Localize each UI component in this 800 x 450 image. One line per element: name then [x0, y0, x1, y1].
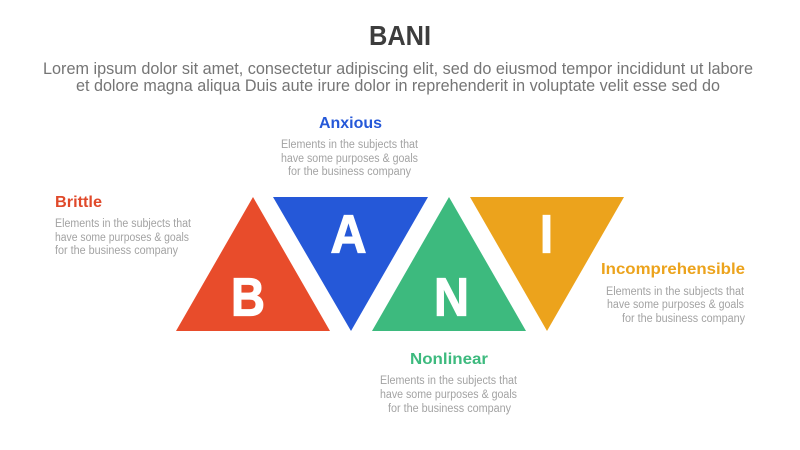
label: Incomprehensible: have some purposes & goals: [607, 299, 744, 311]
label: Anxious: [281, 115, 419, 178]
intro text: Lorem ipsum dolor sit amet, consectetur adipiscing elit, sed do eiusmod tempor incididunt ut labore: [43, 60, 753, 78]
label: Brittle: [55, 194, 192, 257]
label: Nonlinear: for the business company: [388, 403, 511, 415]
intro text: [43, 60, 753, 95]
triangle diagram: [176, 197, 624, 331]
label: Incomprehensible: [601, 261, 745, 325]
label: Brittle: Elements in the subjects that: [55, 218, 192, 230]
label: Nonlinear: have some purposes & goals: [380, 389, 517, 401]
triangle I: orange: [470, 197, 624, 331]
label: Anxious: have some purposes & goals: [281, 153, 418, 165]
label: Nonlinear: Nonlinear: [410, 351, 488, 368]
label: Incomprehensible: for the business company: [622, 313, 745, 325]
label: Brittle: for the business company: [55, 245, 178, 257]
triangle N: green: [372, 197, 526, 331]
label: Anxious: Elements in the subjects that: [281, 139, 419, 151]
label: Anxious: for the business company: [288, 166, 411, 178]
label: Nonlinear: [380, 351, 518, 415]
intro text: et dolore magna aliqua Duis aute irure dolor in reprehenderit in voluptate velit esse sed do: [76, 77, 720, 95]
triangle B: red: B: [231, 268, 265, 328]
triangle A: blue: [273, 197, 428, 331]
label: Incomprehensible: Incomprehensible: [601, 261, 745, 278]
triangle A: blue: A: [330, 204, 366, 264]
title: BANI: [369, 20, 431, 51]
label: Brittle: have some purposes & goals: [55, 232, 189, 244]
label: Brittle: Brittle: [55, 194, 102, 211]
label: Nonlinear: Elements in the subjects that: [380, 375, 518, 387]
triangle I: orange: I: [540, 204, 553, 264]
triangle B: red: [176, 197, 330, 331]
triangle N: green: N: [434, 268, 469, 328]
label: Incomprehensible: Elements in the subjects that: [606, 286, 745, 298]
label: Anxious: Anxious: [319, 115, 382, 132]
